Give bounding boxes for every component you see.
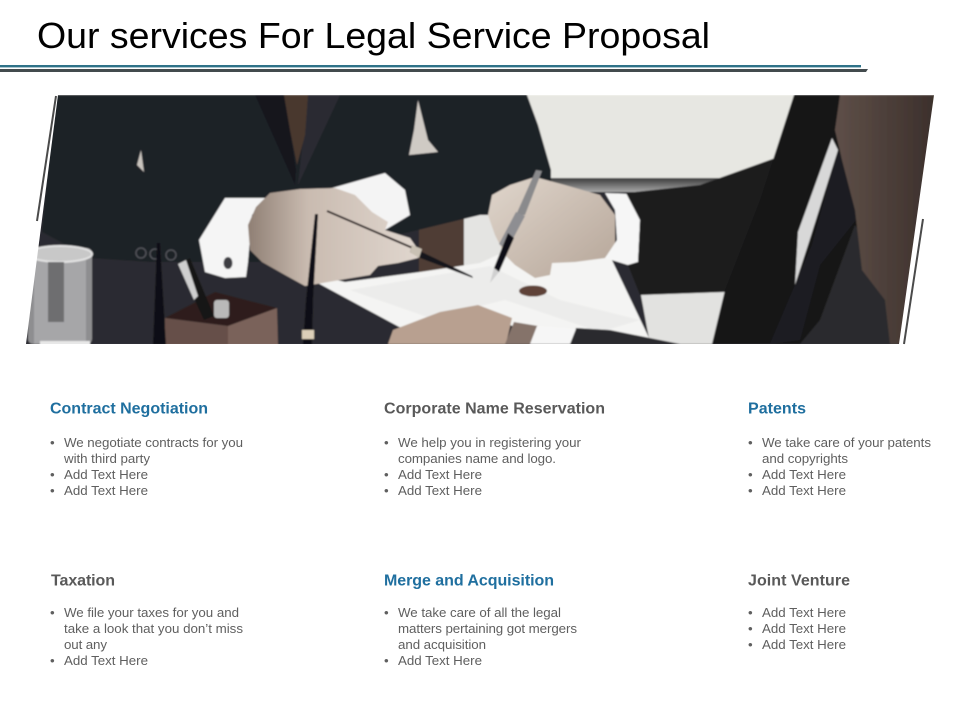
- service: Merge and Acquisition: •: [384, 605, 389, 620]
- service: Patents: •: [748, 435, 753, 450]
- service: Taxation: We file your taxes for you and: [64, 605, 239, 620]
- jacket lapel: [770, 150, 860, 344]
- lower hand: [388, 305, 512, 344]
- service: Joint Venture: •: [748, 605, 753, 620]
- photo: lawyers signing a document: [20, 95, 940, 345]
- service: Contract Negotiation: Add Text Here: [64, 467, 148, 482]
- service: Patents: [748, 400, 931, 498]
- service: Taxation: Taxation: [51, 572, 115, 590]
- service: Taxation: Add Text Here: [64, 653, 148, 668]
- service: Contract Negotiation: •: [50, 435, 55, 450]
- service: Contract Negotiation: We negotiate contracts for you: [64, 435, 243, 450]
- service: Corporate Name Reservation: companies name and logo.: [398, 451, 556, 466]
- service: Patents: Add Text Here: [762, 483, 846, 498]
- service: Patents: •: [748, 483, 753, 498]
- service: Taxation: out any: [64, 637, 107, 652]
- service: Corporate Name Reservation: •: [384, 435, 389, 450]
- pen in right hand: [490, 170, 542, 283]
- service: Contract Negotiation: •: [50, 483, 55, 498]
- title underline: [0, 65, 868, 72]
- service: Joint Venture: Add Text Here: [762, 637, 846, 652]
- service: Corporate Name Reservation: [384, 400, 605, 498]
- service: Contract Negotiation: with third party: [63, 451, 150, 466]
- watch strap: [505, 322, 538, 344]
- desk pen: left: [153, 243, 166, 345]
- chair glimpses: [137, 100, 438, 172]
- service: Joint Venture: Add Text Here: [762, 605, 846, 620]
- left man suit: [42, 95, 551, 262]
- brown chair behind: [418, 218, 465, 272]
- service: Taxation: take a look that you don’t miss: [64, 621, 243, 636]
- cufflink: [224, 257, 232, 269]
- lower sleeve: [570, 328, 680, 344]
- service: Taxation: [50, 572, 243, 668]
- service: Contract Negotiation: Add Text Here: [64, 483, 148, 498]
- service: Merge and Acquisition: [384, 572, 577, 668]
- pen in left hand: [327, 211, 473, 278]
- service: Joint Venture: •: [748, 621, 753, 636]
- shirt strip: [795, 138, 838, 285]
- accent line: right: [904, 219, 923, 344]
- service: Joint Venture: Add Text Here: [762, 621, 846, 636]
- jacket buttons: [136, 248, 176, 260]
- wall and table background: [20, 95, 940, 345]
- pen holder: [165, 258, 278, 345]
- glass: [28, 246, 92, 345]
- service: Merge and Acquisition: Add Text Here: [398, 653, 482, 668]
- service: Joint Venture: Joint Venture: [748, 572, 850, 590]
- service: Patents: We take care of your patents: [762, 435, 931, 450]
- service: Merge and Acquisition: matters pertaining got mergers: [398, 621, 577, 636]
- service: Merge and Acquisition: and acquisition: [398, 637, 486, 652]
- service: Patents: Add Text Here: [762, 467, 846, 482]
- service: Corporate Name Reservation: Add Text Here: [398, 467, 482, 482]
- service: Corporate Name Reservation: Add Text Here: [398, 483, 482, 498]
- lapels and tie: [255, 95, 340, 185]
- service: Corporate Name Reservation: Corporate Name Reservation: [384, 400, 605, 418]
- service: Taxation: •: [50, 605, 55, 620]
- service: Corporate Name Reservation: •: [384, 467, 389, 482]
- left hand: [248, 188, 418, 286]
- service: Merge and Acquisition: •: [384, 653, 389, 668]
- service: Joint Venture: •: [748, 637, 753, 652]
- title: Our services For Legal Service Proposal: [37, 15, 710, 56]
- service: Patents: and copyrights: [762, 451, 848, 466]
- right cuff: [605, 193, 640, 265]
- paper: [318, 254, 650, 339]
- service: Corporate Name Reservation: We help you in registering your: [398, 435, 582, 450]
- service: Merge and Acquisition: Merge and Acquisition: [384, 572, 554, 590]
- service: Taxation: •: [50, 653, 55, 668]
- wax seal: [519, 286, 547, 296]
- hair: [835, 95, 940, 344]
- service: Merge and Acquisition: We take care of all the legal: [398, 605, 561, 620]
- right man suit and arm: [711, 95, 857, 344]
- left cuff (near): [199, 198, 268, 278]
- desk pen: right: [302, 214, 318, 345]
- service: Contract Negotiation: [50, 400, 243, 498]
- service: Contract Negotiation: Contract Negotiation: [50, 400, 208, 418]
- left cuff (far): [325, 173, 410, 230]
- right man sleeve: [626, 158, 774, 296]
- service: Joint Venture: [748, 572, 850, 652]
- service: Patents: •: [748, 467, 753, 482]
- service: Corporate Name Reservation: •: [384, 483, 389, 498]
- service: Patents: Patents: [748, 400, 806, 418]
- service: Contract Negotiation: •: [50, 467, 55, 482]
- lower cuff: [530, 326, 576, 344]
- accent line: left: [37, 96, 56, 221]
- right hand: [488, 177, 615, 278]
